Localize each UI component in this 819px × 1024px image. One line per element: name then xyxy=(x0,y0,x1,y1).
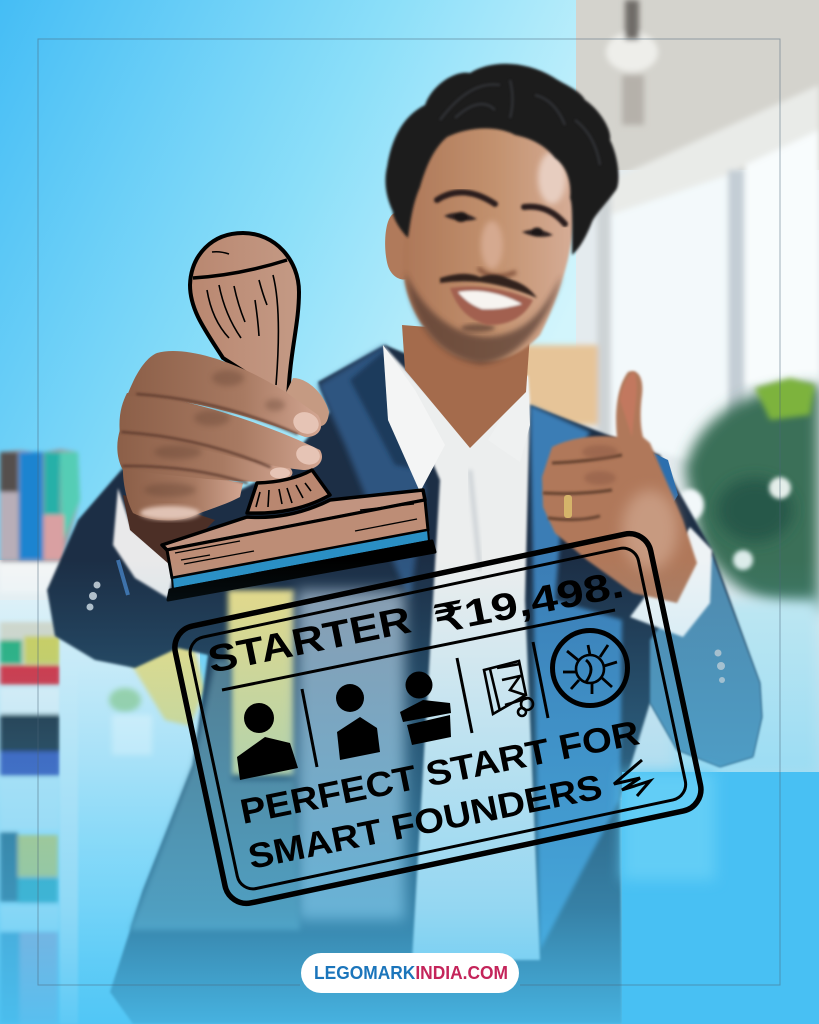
icon dividers xyxy=(302,642,548,767)
icon: person two xyxy=(336,684,380,760)
stamp heading: STARTER: STARTER xyxy=(204,600,415,682)
mouth with smile xyxy=(440,274,537,325)
palm and little finger xyxy=(123,463,243,520)
icon: zigzag mark xyxy=(614,760,650,796)
person: left shirt cuff xyxy=(113,488,176,598)
background small plant xyxy=(109,688,141,712)
stamp: collar and base xyxy=(162,470,435,600)
background yellow chair xyxy=(130,640,205,726)
forehead highlight xyxy=(538,152,566,204)
icon: person one xyxy=(237,703,298,780)
sleeve buttons xyxy=(86,582,725,683)
background: blurred shelves on the left xyxy=(0,449,205,1024)
ring xyxy=(564,495,572,518)
nose shadow xyxy=(478,268,516,276)
hair xyxy=(385,64,618,255)
stamp price: ₹19,498. xyxy=(431,564,627,642)
person: left wrist xyxy=(123,495,215,565)
stamp tagline line two: SMART FOUNDERS xyxy=(245,767,605,877)
stubble beard xyxy=(405,272,562,364)
fingernails xyxy=(270,409,322,478)
background: blurred office on the right xyxy=(520,0,819,800)
eyebrows xyxy=(437,192,565,224)
icon: circular sun badge xyxy=(552,630,628,706)
back finger xyxy=(285,378,329,426)
jacket right panel xyxy=(530,405,622,950)
stamp: wooden handle xyxy=(190,233,299,400)
stamp tagline line one: PERFECT START FOR xyxy=(237,713,643,832)
eyes xyxy=(444,212,553,237)
face xyxy=(403,119,575,362)
person: right cuff xyxy=(630,527,712,637)
website pill xyxy=(301,953,519,993)
ear xyxy=(385,213,408,280)
background: blue gradient panel xyxy=(0,0,576,600)
knuckle shading xyxy=(144,370,285,497)
person: shirt xyxy=(383,345,540,960)
person: head xyxy=(385,64,618,364)
stamp outer and inner frames xyxy=(171,530,705,907)
stamp impression xyxy=(171,530,705,907)
bottom right blue table xyxy=(622,772,819,1024)
middle finger xyxy=(119,393,322,470)
icon: document with seal xyxy=(484,661,533,716)
person: left hand gripping stamp xyxy=(117,351,329,520)
person: neck xyxy=(402,325,530,448)
jacket yellow reflection xyxy=(228,590,294,775)
person: right hand thumbs up xyxy=(542,371,697,603)
stamp divider xyxy=(222,610,615,690)
right hand shading xyxy=(622,490,678,570)
website pill: LEGOMARKINDIA.COM xyxy=(314,963,508,983)
background plant xyxy=(675,378,819,775)
finger creases xyxy=(122,394,297,483)
bottom blue fade xyxy=(0,560,819,1024)
jacket right sleeve xyxy=(650,555,762,767)
jacket grey reflection xyxy=(297,590,405,920)
ring finger xyxy=(117,430,292,482)
index finger xyxy=(127,351,321,437)
jacket left lapel xyxy=(318,345,425,600)
icon: person three xyxy=(400,672,451,745)
person: jacket xyxy=(47,345,762,1024)
